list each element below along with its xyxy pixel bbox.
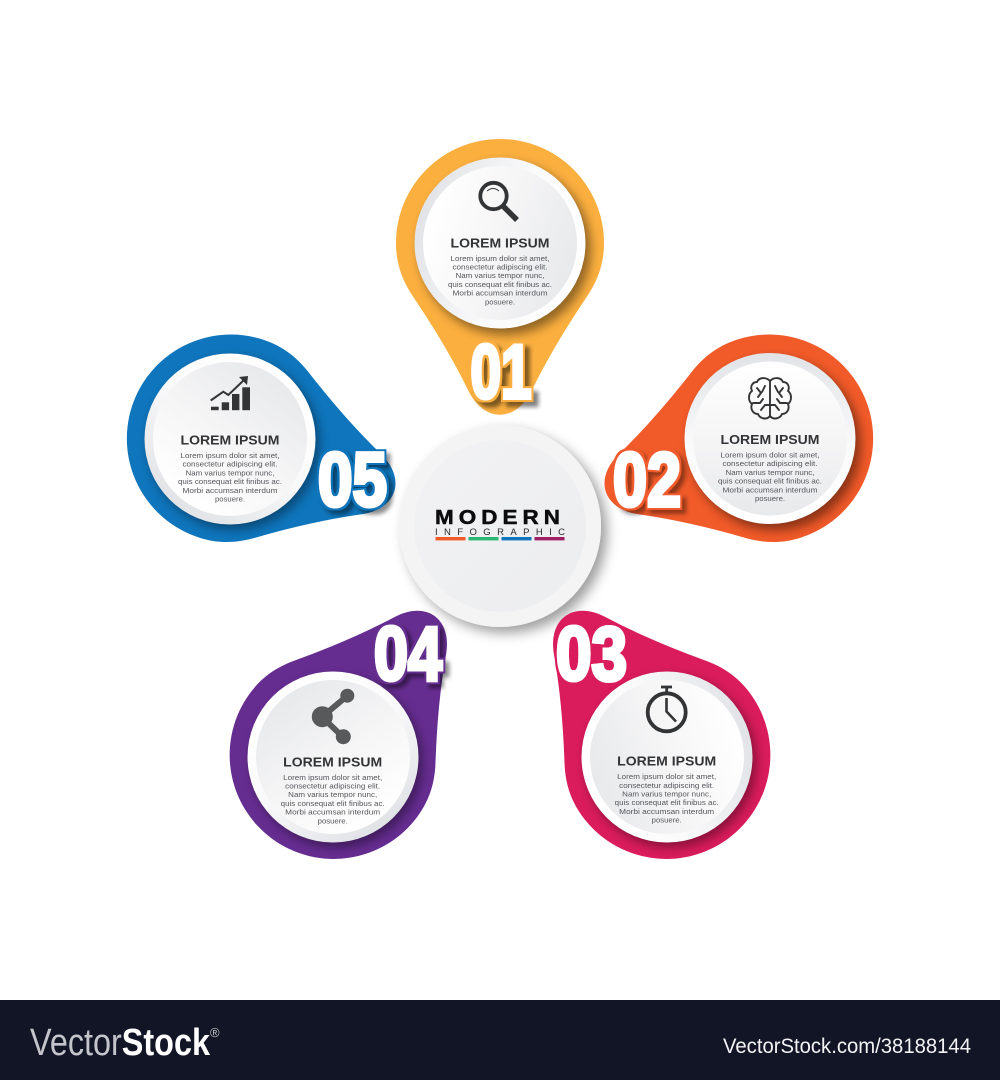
text block 02: quis consequat elit finibus ac. [718, 477, 822, 486]
footer logo: VectorStock [30, 1022, 211, 1064]
text block 02: consectetur adipiscing elit. [722, 459, 818, 468]
text block 01: Morbi accumsan interdum [452, 289, 548, 298]
text block 04: Nam varius tempor nunc, [288, 790, 377, 799]
text block 01: quis consequat elit finibus ac. [448, 280, 552, 289]
text block 03: posuere. [652, 816, 682, 825]
text block 05: Nam varius tempor nunc, [186, 468, 274, 477]
text block 04: quis consequat elit finibus ac. [281, 799, 385, 808]
heading 01: LOREM IPSUM [450, 235, 550, 250]
text block 02: posuere. [755, 494, 785, 503]
panel 01: yellow pin [396, 139, 604, 415]
number 04: 04 [374, 612, 442, 697]
icon: growth chart [211, 376, 250, 410]
text block 02 [718, 450, 822, 503]
text block 05 [178, 451, 282, 504]
logo: modern infographic: MODERN [435, 507, 565, 529]
text block 05: consectetur adipiscing elit. [182, 460, 278, 469]
text block 03: quis consequat elit finibus ac. [615, 798, 719, 807]
text block 05: Morbi accumsan interdum [182, 486, 278, 495]
text block 04 [281, 773, 385, 825]
icon: stopwatch [648, 687, 686, 731]
footer id: VectorStock.com/38188144 [723, 1035, 971, 1058]
icon: brain [749, 378, 791, 418]
center disc: modern infographic [399, 425, 601, 627]
heading 05: LOREM IPSUM [180, 433, 280, 448]
panel 05: blue pin [126, 334, 396, 542]
number 02: 02 [613, 438, 681, 523]
text block 02: Morbi accumsan interdum [722, 485, 818, 494]
text block 03 [615, 772, 719, 825]
text block 05: Lorem ipsum dolor sit amet, [180, 451, 280, 460]
heading 04: LOREM IPSUM [283, 754, 382, 769]
text block 01: Nam varius tempor nunc, [456, 271, 544, 280]
panel 02: orange pin [604, 334, 874, 542]
footer bar [0, 1000, 1000, 1080]
logo: modern infographic: INFOGRAPHIC [435, 527, 565, 538]
text block 04: Morbi accumsan interdum [285, 808, 380, 817]
heading 02: LOREM IPSUM [720, 432, 820, 447]
text block 01 [448, 254, 552, 306]
registered mark: ® [210, 1025, 220, 1040]
text block 02: Nam varius tempor nunc, [726, 468, 814, 477]
text block 02: Lorem ipsum dolor sit amet, [720, 450, 820, 460]
number 01: 01 [470, 330, 532, 415]
text block 04: posuere. [318, 816, 348, 825]
text block 01: Lorem ipsum dolor sit amet, [450, 254, 550, 263]
icon: magnifier [480, 183, 517, 220]
number 05: 05 [318, 438, 387, 523]
panel 04: purple pin [230, 610, 452, 859]
icon: share nodes [312, 689, 354, 744]
text block 04: Lorem ipsum dolor sit amet, [283, 773, 382, 782]
text block 01: consectetur adipiscing elit. [452, 262, 548, 272]
text block 01: posuere. [485, 297, 515, 306]
text block 03: Nam varius tempor nunc, [622, 790, 711, 798]
text block 03: Morbi accumsan interdum [619, 807, 714, 816]
number 03: 03 [556, 612, 627, 697]
text block 03: consectetur adipiscing elit. [619, 781, 714, 790]
panel 03: crimson pin [553, 610, 770, 859]
text block 03: Lorem ipsum dolor sit amet, [617, 772, 716, 781]
text block 04: consectetur adipiscing elit. [285, 782, 380, 790]
text block 05: posuere. [215, 494, 245, 504]
logo: modern infographic [435, 507, 565, 540]
heading 03: LOREM IPSUM [617, 754, 716, 769]
text block 05: quis consequat elit finibus ac. [178, 477, 282, 486]
